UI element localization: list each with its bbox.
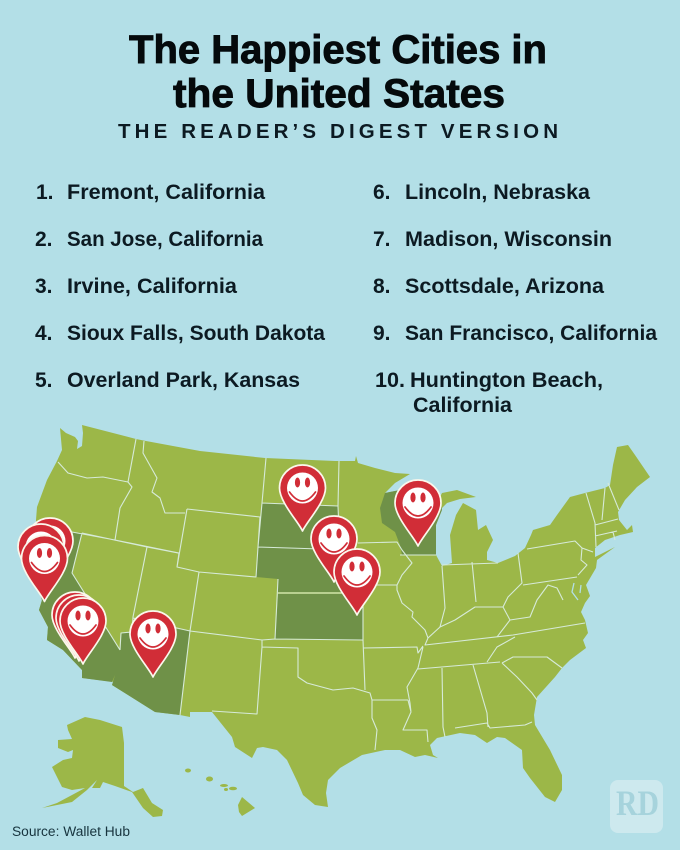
Chesapeake and Delaware bays <box>572 583 581 600</box>
highlighted states: California, Arizona, Nebraska, South Dakota, Kansas, Wisconsin <box>36 487 442 715</box>
list: cities 1 to 5: 2. <box>35 228 53 251</box>
list: cities 1 to 5: Irvine, California <box>67 275 237 298</box>
Hawaii <box>185 768 255 816</box>
logo: RD <box>610 780 663 833</box>
pin: Overland Park <box>334 549 380 615</box>
logo: RD: RD <box>616 783 659 823</box>
title: The Happiest Cities in <box>129 28 547 72</box>
pin: San Francisco <box>22 536 68 602</box>
pin: Lincoln <box>311 516 357 582</box>
list: cities 6 to 10: Madison, Wisconsin <box>405 228 612 251</box>
pin: Huntington Beach area <box>56 595 102 661</box>
contiguous states landmass <box>36 425 650 807</box>
pin: Scottsdale <box>130 611 176 677</box>
list: cities 6 to 10: 7. <box>373 228 391 251</box>
list: cities 6 to 10: Huntington Beach, <box>410 369 603 392</box>
state borders <box>36 439 619 750</box>
list: cities 6 to 10: California <box>413 394 512 417</box>
list: cities 1 to 5: Overland Park, Kansas <box>67 369 300 392</box>
list: cities 1 to 5: Sioux Falls, South Dakota <box>67 322 325 345</box>
pin: Southern California <box>60 598 106 664</box>
list: cities 6 to 10 <box>373 181 657 417</box>
list: cities 1 to 5: 1. <box>36 181 54 204</box>
list: cities 6 to 10: San Francisco, California <box>405 322 657 345</box>
list: cities 6 to 10: 9. <box>373 322 391 345</box>
list: cities 1 to 5 <box>35 181 325 392</box>
pin: Sioux Falls <box>280 465 326 531</box>
list: cities 1 to 5: 5. <box>35 369 53 392</box>
pin: Irvine <box>52 592 98 658</box>
list: cities 6 to 10: Scottsdale, Arizona <box>405 275 604 298</box>
list: cities 1 to 5: Fremont, California <box>67 181 265 204</box>
list: cities 6 to 10: 10. <box>375 369 405 392</box>
list: cities 1 to 5: 3. <box>35 275 53 298</box>
list: cities 6 to 10: 6. <box>373 181 391 204</box>
pin: Fremont <box>27 518 73 584</box>
list: cities 1 to 5: San Jose, California <box>67 228 263 251</box>
title <box>129 28 547 116</box>
list: cities 6 to 10: Lincoln, Nebraska <box>405 181 590 204</box>
title: the United States <box>173 72 505 116</box>
Alaska <box>42 717 163 817</box>
subtitle: THE READER’S DIGEST VERSION <box>118 120 558 143</box>
pin: San Jose <box>18 524 64 590</box>
list: cities 6 to 10: 8. <box>373 275 391 298</box>
source note: Source: Wallet Hub <box>12 824 130 839</box>
map pins <box>18 465 441 677</box>
pin: Madison <box>395 480 441 546</box>
list: cities 1 to 5: 4. <box>35 322 53 345</box>
map of the United States <box>36 425 650 807</box>
